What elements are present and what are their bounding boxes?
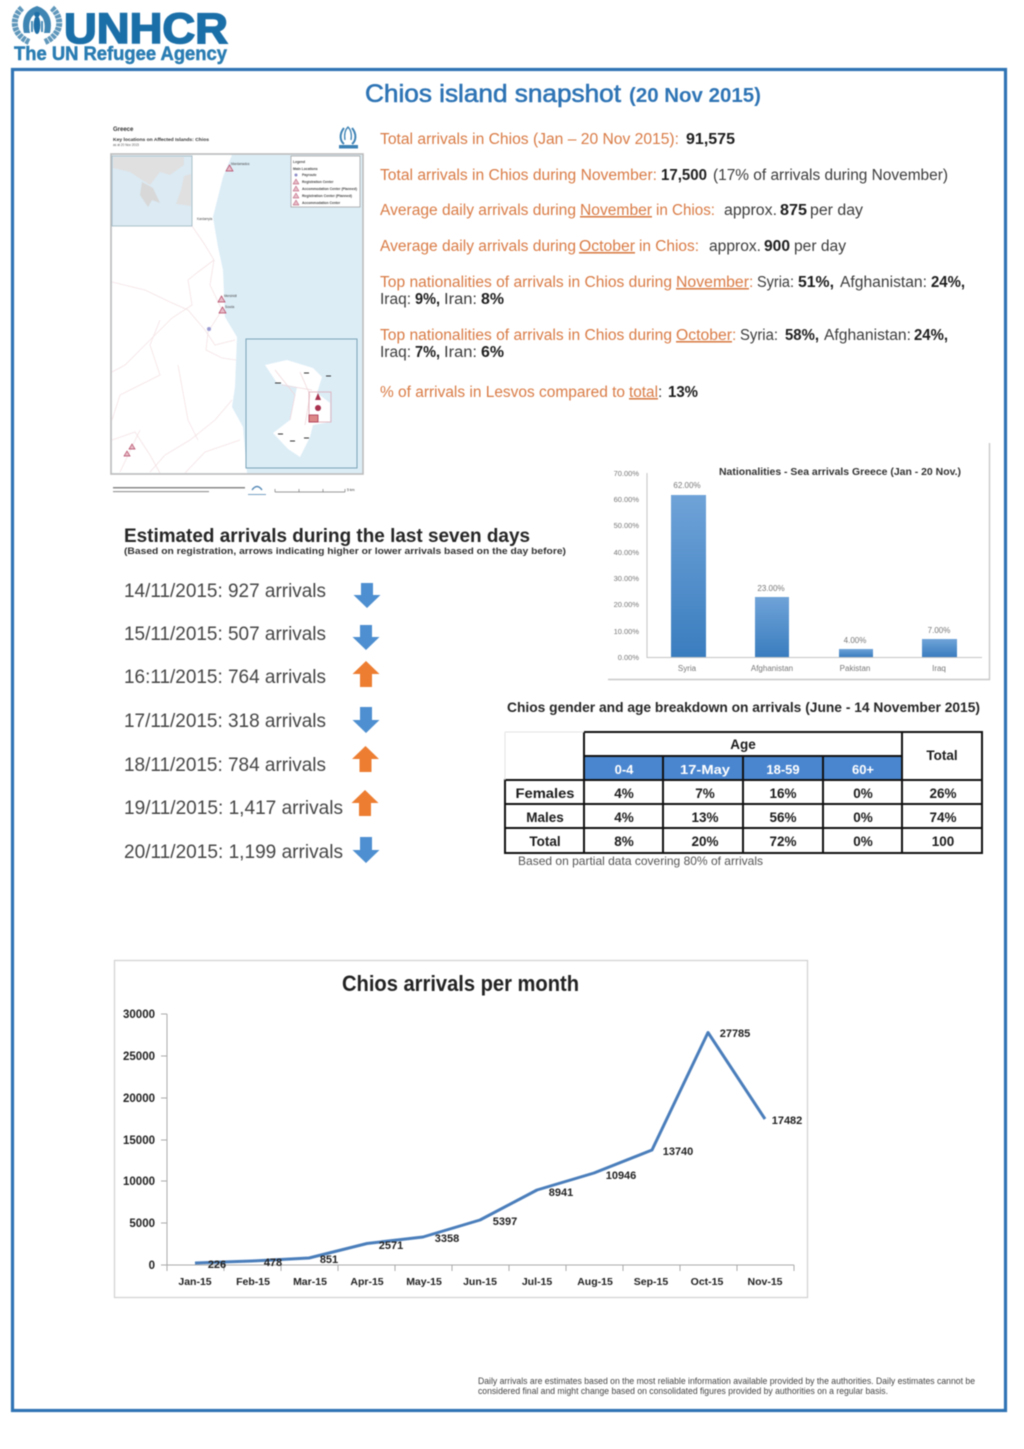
key figures text block bbox=[380, 131, 965, 401]
map titles: Key locations on Affected Islands: Chios bbox=[113, 137, 209, 142]
legend: Accommodation Center (Planned) bbox=[302, 187, 357, 191]
heading: gender and age: Chios gender and age breakdown on arrivals (June - 14 November 2015) bbox=[507, 699, 980, 715]
row: females: Females bbox=[516, 786, 574, 801]
table header labels: Age bbox=[730, 737, 756, 752]
y axis labels: 60.00% bbox=[614, 495, 639, 504]
x axis labels: Nov-15 bbox=[747, 1276, 783, 1288]
chart title: Nationalities - Sea arrivals Greece (Jan - 20 Nov.) bbox=[719, 466, 961, 478]
data labels: 5397 bbox=[493, 1216, 517, 1228]
row: males bbox=[526, 810, 957, 825]
daily average November bbox=[380, 202, 863, 219]
total arrivals: 91,575 bbox=[686, 131, 735, 148]
Lesvos comparison: % of arrivals in Lesvos compared to bbox=[380, 384, 625, 401]
table header labels: Total bbox=[926, 748, 958, 763]
legend: Legend bbox=[293, 160, 305, 164]
y axis labels bbox=[614, 469, 639, 662]
November arrivals: Total arrivals in Chios during November: bbox=[380, 167, 657, 184]
x axis labels: Apr-15 bbox=[350, 1276, 384, 1288]
title: (20 Nov 2015) bbox=[629, 85, 761, 107]
daily arrivals list: 14/11/2015: 927 arrivals bbox=[124, 580, 326, 602]
logo wordmark: UNHCR bbox=[64, 5, 228, 53]
roads bbox=[112, 226, 240, 473]
nationalities November: Top nationalities of arrivals in Chios during bbox=[380, 274, 672, 291]
y axis labels: 20000 bbox=[123, 1093, 155, 1105]
icon: arrow down bbox=[352, 707, 380, 733]
icon: arrow down bbox=[352, 837, 380, 863]
data labels: 2571 bbox=[379, 1240, 403, 1252]
bar category labels bbox=[678, 664, 946, 673]
daily average November: per day bbox=[810, 202, 863, 219]
y axis labels: 10000 bbox=[123, 1176, 155, 1188]
UNHCR logo bbox=[14, 5, 228, 65]
data labels bbox=[208, 1028, 802, 1271]
bar category labels: Pakistan bbox=[840, 664, 870, 673]
daily average October: approx. bbox=[709, 238, 761, 255]
axes bbox=[161, 1014, 794, 1271]
bar value labels: 7.00% bbox=[928, 626, 950, 635]
heading: estimated arrivals: (Based on registration, arrows indicating higher or lower arrivals based on the day before) bbox=[124, 546, 566, 557]
table note: Based on partial data covering 80% of arrivals bbox=[518, 854, 763, 868]
footer note: considered final and might change based on consolidated figures provided by authorities on a regular basis. bbox=[478, 1386, 888, 1396]
daily average November: Average daily arrivals during bbox=[380, 202, 576, 219]
y axis labels: 70.00% bbox=[614, 469, 639, 478]
bar category labels: Iraq bbox=[932, 664, 946, 673]
row: total bbox=[529, 834, 954, 849]
November arrivals bbox=[380, 167, 948, 184]
row: females: 0% bbox=[853, 786, 873, 801]
line chart: arrivals per month bbox=[114, 960, 808, 1298]
row: males: 13% bbox=[691, 810, 719, 825]
row: total: 100 bbox=[932, 834, 954, 849]
map titles: Greece bbox=[113, 127, 134, 133]
inset: region overview bbox=[112, 156, 192, 226]
row: females: 4% bbox=[614, 786, 634, 801]
row: females: 7% bbox=[695, 786, 715, 801]
nationalities October: 24%, bbox=[914, 327, 948, 344]
nationalities October: October bbox=[676, 327, 732, 344]
nationalities October: 58%, bbox=[785, 327, 819, 344]
map footer and scale bar bbox=[113, 486, 355, 495]
data labels: 10946 bbox=[606, 1170, 636, 1182]
row: males: 56% bbox=[769, 810, 797, 825]
y axis labels bbox=[123, 1009, 155, 1272]
daily arrivals list: 20/11/2015: 1,199 arrivals bbox=[124, 841, 343, 863]
map titles bbox=[113, 127, 209, 147]
map footer and scale bar: 5 km bbox=[347, 488, 355, 492]
daily average November: November bbox=[580, 202, 652, 219]
y axis labels: 10.00% bbox=[614, 627, 639, 636]
y axis labels: 15000 bbox=[123, 1135, 155, 1147]
nationalities November bbox=[380, 274, 965, 308]
row: total: Total bbox=[529, 834, 561, 849]
y axis labels: 50.00% bbox=[614, 521, 639, 530]
chart title: Chios arrivals per month bbox=[342, 971, 579, 996]
bar value labels: 62.00% bbox=[673, 481, 701, 490]
data labels: 226 bbox=[208, 1259, 226, 1271]
data labels: 3358 bbox=[435, 1233, 459, 1245]
daily average October: per day bbox=[794, 238, 846, 255]
legend: Main Locations bbox=[293, 167, 318, 171]
x axis labels: Mar-15 bbox=[293, 1276, 327, 1288]
nationalities October: : bbox=[732, 327, 736, 344]
row: total: 0% bbox=[853, 834, 873, 849]
mainland coast bbox=[112, 155, 247, 473]
icon: arrow down bbox=[354, 583, 380, 608]
icon: arrow up bbox=[352, 790, 378, 816]
table header labels: 18-59 bbox=[766, 762, 800, 777]
map markers: Souda bbox=[225, 305, 234, 309]
icon: arrow up bbox=[352, 746, 379, 772]
nationalities October: Iran: bbox=[444, 344, 477, 361]
Chios inset bbox=[246, 339, 357, 468]
heading: estimated arrivals: Estimated arrivals during the last seven days bbox=[124, 526, 530, 547]
x axis labels: Jan-15 bbox=[178, 1276, 212, 1288]
nationalities October: Top nationalities of arrivals in Chios during bbox=[380, 327, 672, 344]
nationalities November: Iraq: bbox=[380, 291, 411, 308]
nationalities October: 6% bbox=[481, 344, 504, 361]
nationalities October: Afghanistan: bbox=[824, 327, 911, 344]
nationalities November: 9%, bbox=[415, 291, 440, 308]
daily arrivals list: 16:11/2015: 764 arrivals bbox=[124, 666, 326, 688]
x axis labels: Aug-15 bbox=[577, 1276, 613, 1288]
y axis labels: 40.00% bbox=[614, 548, 639, 557]
data line bbox=[195, 1032, 765, 1263]
bar value labels: 23.00% bbox=[757, 584, 785, 593]
data labels: 8941 bbox=[549, 1187, 573, 1199]
logo tagline: The UN Refugee Agency bbox=[14, 44, 227, 65]
x axis labels: May-15 bbox=[406, 1276, 442, 1288]
table header labels: 60+ bbox=[852, 762, 874, 777]
daily average October: October bbox=[579, 238, 635, 255]
bar category labels: Afghanistan bbox=[751, 664, 793, 673]
row: total: 20% bbox=[691, 834, 719, 849]
daily average October: 900 bbox=[764, 238, 790, 255]
icon: arrow down bbox=[352, 625, 380, 650]
x axis labels bbox=[178, 1276, 783, 1288]
November arrivals: 17,500 bbox=[661, 167, 707, 184]
y axis labels: 30.00% bbox=[614, 574, 639, 583]
legend bbox=[291, 156, 360, 207]
data labels: 478 bbox=[264, 1257, 282, 1269]
row: males: 0% bbox=[853, 810, 873, 825]
table grid bbox=[505, 732, 982, 853]
Lesvos comparison: 13% bbox=[668, 384, 698, 401]
legend: Registration Center bbox=[302, 180, 334, 184]
nationalities November: Iran: bbox=[444, 291, 477, 308]
y axis labels: 0 bbox=[149, 1260, 155, 1272]
table header labels bbox=[615, 737, 958, 777]
nationalities November: 24%, bbox=[931, 274, 965, 291]
title: Chios island snapshot bbox=[365, 80, 621, 108]
x axis labels: Jun-15 bbox=[463, 1276, 497, 1288]
nationalities November: 8% bbox=[481, 291, 504, 308]
daily arrivals list bbox=[124, 580, 380, 863]
nationalities November: Syria: bbox=[757, 274, 794, 291]
map markers: Mantamados bbox=[231, 162, 250, 166]
nationalities October: Syria: bbox=[740, 327, 778, 344]
nationalities October: Iraq: bbox=[380, 344, 411, 361]
row: total: 72% bbox=[769, 834, 797, 849]
table: gender and age breakdown bbox=[505, 732, 982, 853]
bars bbox=[671, 495, 957, 657]
daily arrivals list: 17/11/2015: 318 arrivals bbox=[124, 710, 326, 732]
x axis labels: Jul-15 bbox=[522, 1276, 552, 1288]
data labels: 27785 bbox=[720, 1028, 750, 1040]
row: females: 26% bbox=[929, 786, 957, 801]
daily average November: in Chios: bbox=[656, 202, 715, 219]
y axis labels: 0.00% bbox=[618, 653, 639, 662]
nationalities October: 7%, bbox=[415, 344, 440, 361]
x axis labels: Oct-15 bbox=[691, 1276, 723, 1288]
daily arrivals list: 18/11/2015: 784 arrivals bbox=[124, 754, 326, 776]
y axis labels: 5000 bbox=[129, 1218, 155, 1230]
table header fill bbox=[584, 756, 902, 780]
Lesvos comparison: : bbox=[658, 384, 662, 401]
nationalities November: November bbox=[676, 274, 749, 291]
table header labels: 0-4 bbox=[615, 762, 634, 777]
heading: estimated arrivals bbox=[124, 526, 566, 557]
icon: small UNHCR emblem bbox=[339, 127, 358, 148]
row: males: Males bbox=[526, 810, 564, 825]
daily average October: Average daily arrivals during bbox=[380, 238, 576, 255]
data labels: 851 bbox=[320, 1254, 338, 1266]
nationalities November: 51%, bbox=[798, 274, 834, 291]
footer note bbox=[478, 1376, 975, 1396]
row: females: 16% bbox=[769, 786, 797, 801]
bar category labels: Syria bbox=[678, 664, 697, 673]
y axis labels: 30000 bbox=[123, 1009, 155, 1021]
panel: map of Chios key locations bbox=[111, 127, 363, 495]
Lesvos comparison: total bbox=[629, 384, 658, 401]
map body bbox=[111, 154, 363, 474]
map titles: as at 20 Nov 2015 bbox=[113, 143, 139, 147]
daily average October bbox=[380, 238, 846, 255]
icon: UNHCR emblem bbox=[15, 6, 59, 42]
November arrivals: (17% of arrivals during November) bbox=[713, 167, 948, 184]
legend: Accommodation Center bbox=[302, 201, 341, 205]
map markers: Mersinidi bbox=[224, 294, 237, 298]
y axis labels: 25000 bbox=[123, 1051, 155, 1063]
bar chart: nationalities bbox=[608, 443, 990, 680]
daily arrivals list: 19/11/2015: 1,417 arrivals bbox=[124, 797, 343, 819]
legend: Registration Center (Planned) bbox=[302, 194, 352, 198]
map markers: Kardamyla bbox=[197, 217, 212, 221]
y axis labels: 20.00% bbox=[614, 600, 639, 609]
row: males: 74% bbox=[929, 810, 957, 825]
data labels: 13740 bbox=[663, 1146, 693, 1158]
total arrivals: Total arrivals in Chios (Jan – 20 Nov 2015): bbox=[380, 131, 679, 148]
row: females bbox=[516, 786, 957, 801]
footer note: Daily arrivals are estimates based on the most reliable information available provided by the authorities. Daily estimates cannot be bbox=[478, 1376, 975, 1386]
daily average November: approx. bbox=[724, 202, 777, 219]
nationalities November: Afghanistan: bbox=[840, 274, 927, 291]
icon: arrow up bbox=[352, 661, 380, 687]
row: males: 4% bbox=[614, 810, 634, 825]
data labels: 17482 bbox=[772, 1115, 802, 1127]
daily average October: in Chios: bbox=[639, 238, 699, 255]
daily arrivals list: 15/11/2015: 507 arrivals bbox=[124, 623, 326, 645]
map markers bbox=[124, 162, 250, 456]
row: total: 8% bbox=[614, 834, 634, 849]
bar value labels: 4.00% bbox=[844, 636, 866, 645]
legend: Payroute bbox=[302, 173, 317, 177]
x axis labels: Feb-15 bbox=[236, 1276, 270, 1288]
title bbox=[365, 80, 761, 108]
bar value labels bbox=[673, 481, 950, 645]
table header labels: 17-May bbox=[680, 762, 731, 777]
nationalities October bbox=[380, 327, 948, 361]
daily average November: 875 bbox=[780, 202, 807, 219]
x axis labels: Sep-15 bbox=[634, 1276, 668, 1288]
nationalities November: : bbox=[749, 274, 753, 291]
